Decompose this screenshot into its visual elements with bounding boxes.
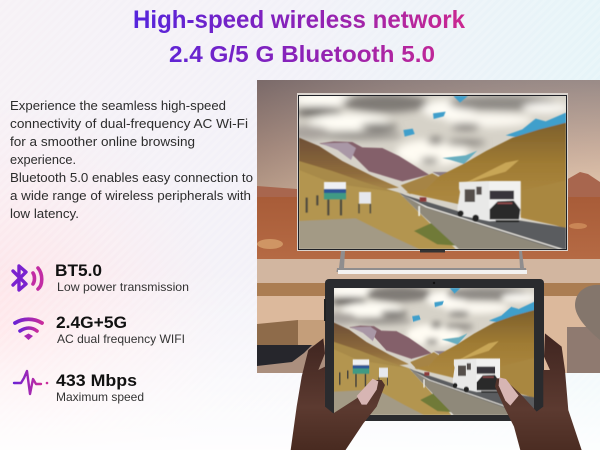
feature: WiFi: AC dual frequency WIFI — [57, 332, 185, 346]
feature: speed: 433 Mbps — [56, 371, 137, 390]
description text: experience. — [10, 152, 76, 167]
description text: low latency. — [10, 206, 79, 221]
description text: connectivity of dual-frequency AC Wi-Fi — [10, 116, 248, 131]
title: High-speed wireless network — [133, 6, 465, 34]
feature: BT5.0 — [13, 261, 189, 294]
icon: wifi — [15, 319, 42, 340]
icon: bluetooth — [13, 266, 42, 290]
television — [289, 92, 569, 274]
title — [133, 6, 465, 67]
tablet — [324, 279, 544, 421]
hands — [291, 333, 582, 450]
feature: speed: Maximum speed — [56, 390, 144, 404]
feature: speed — [14, 371, 144, 404]
description text: Experience the seamless high-speed — [10, 98, 226, 113]
description text: Bluetooth 5.0 enables easy connection to — [10, 170, 253, 185]
description text — [10, 98, 253, 221]
right hand — [495, 333, 582, 450]
left hand — [291, 338, 385, 450]
icon: pulse — [14, 371, 48, 394]
room photo — [257, 80, 600, 373]
title: 2.4 G/5 G Bluetooth 5.0 — [169, 41, 435, 67]
feature: BT5.0: BT5.0 — [55, 261, 102, 280]
description text: a wide range of wireless peripherals with — [10, 188, 251, 203]
description text: for a smoother online browsing — [10, 134, 195, 149]
feature: BT5.0: Low power transmission — [57, 280, 189, 294]
feature: WiFi: 2.4G+5G — [56, 313, 127, 332]
feature: WiFi — [15, 313, 185, 346]
